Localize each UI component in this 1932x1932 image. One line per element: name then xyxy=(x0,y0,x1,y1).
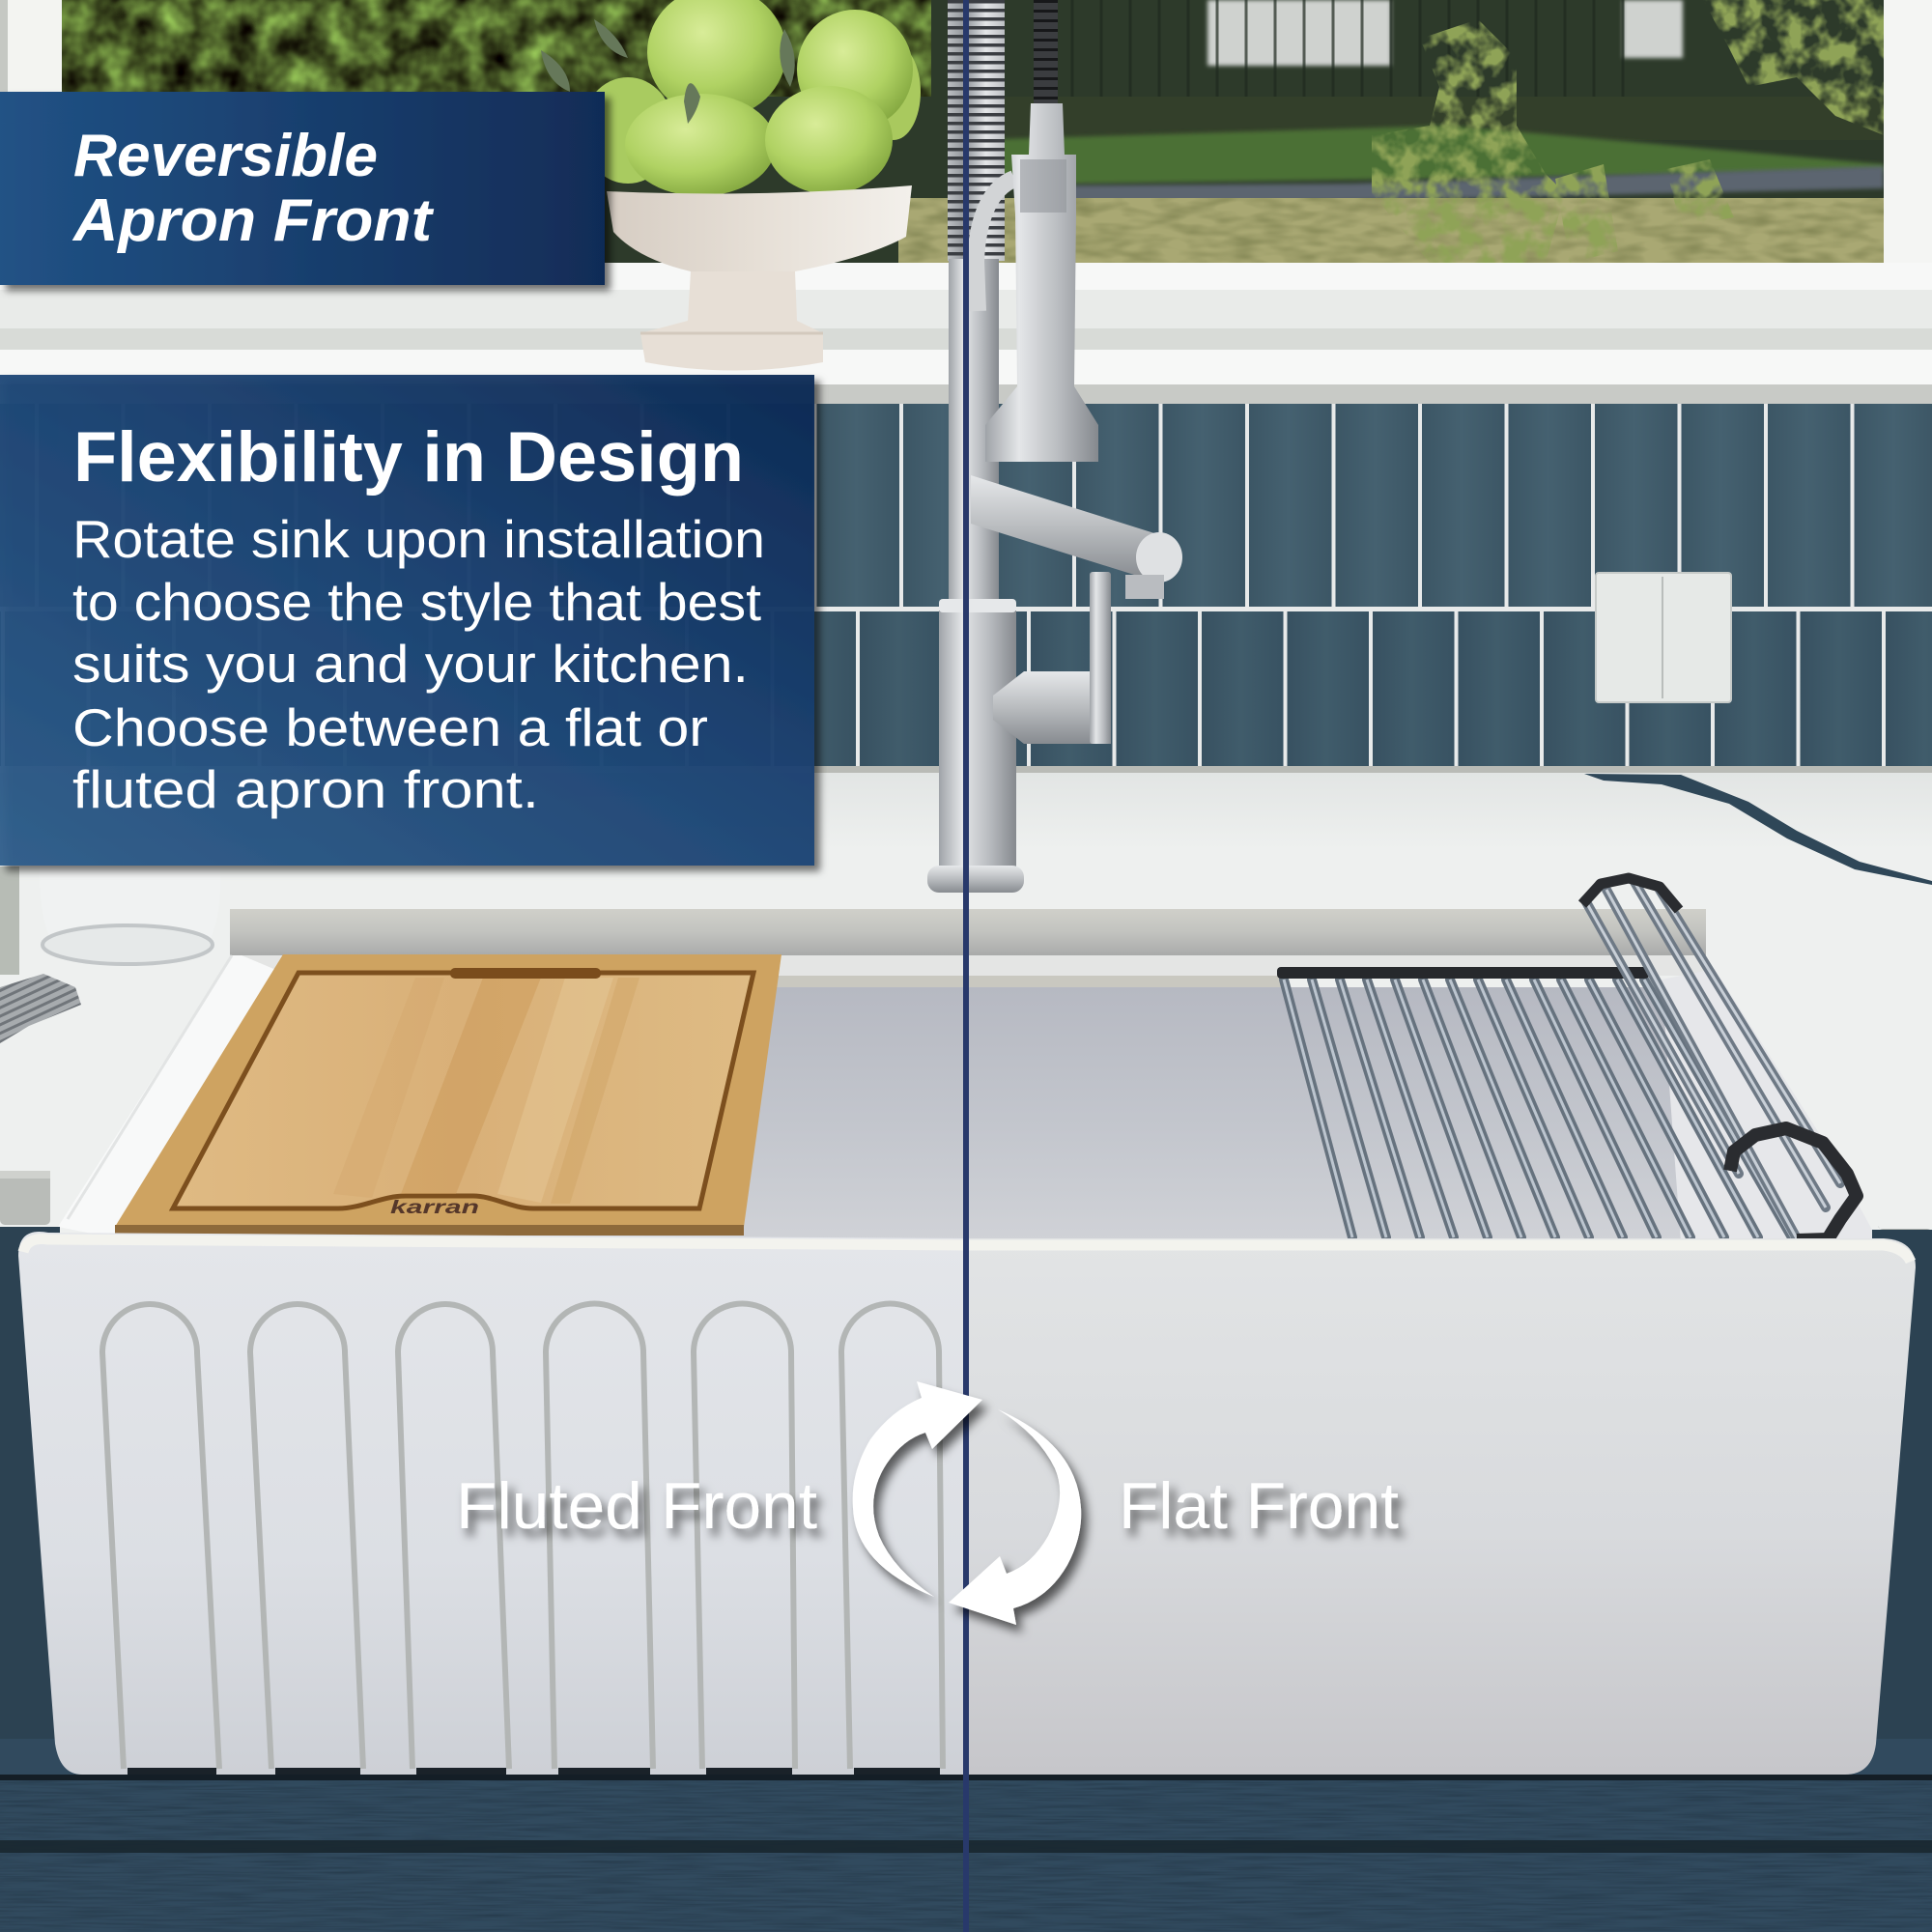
arrow: upper left xyxy=(853,1381,982,1597)
panel title xyxy=(71,123,434,254)
heading: Flexibility in Design xyxy=(73,418,744,497)
panel title: Reversible xyxy=(73,123,378,189)
sink basin xyxy=(290,955,1932,1242)
background: view through window xyxy=(62,0,1893,263)
body text: Rotate sink upon installation xyxy=(72,509,765,569)
faucet xyxy=(927,0,1182,893)
panel: reversible apron front xyxy=(0,92,605,285)
label: flat front: Flat Front xyxy=(1119,1469,1399,1543)
countertop xyxy=(0,766,1932,1249)
wall switch xyxy=(1596,573,1731,702)
apple bowl xyxy=(541,0,921,371)
riser xyxy=(949,259,999,607)
farmhouse apron: flat half xyxy=(966,1238,1916,1775)
flutes xyxy=(102,1304,943,1769)
panel title: Apron Front xyxy=(71,187,434,254)
wood planks xyxy=(333,978,639,1204)
cutting board xyxy=(115,954,781,1236)
column xyxy=(939,611,1016,869)
body text xyxy=(72,509,765,819)
brand mark on board: karran xyxy=(390,1198,479,1218)
board inner panel xyxy=(173,973,753,1208)
body text: fluted apron front. xyxy=(72,759,539,819)
panel: flexibility in design xyxy=(0,375,814,866)
spout xyxy=(971,475,1154,580)
body text: suits you and your kitchen. xyxy=(72,634,749,694)
center divider line xyxy=(963,0,969,1932)
cabinet xyxy=(0,1227,1932,1932)
folded towel xyxy=(0,974,81,1043)
icon: rotation arrows xyxy=(853,1381,1081,1625)
base xyxy=(927,866,1024,893)
marble vein xyxy=(1584,774,1932,885)
apples xyxy=(541,0,921,196)
fence bars xyxy=(1072,0,1623,97)
body text: Choose between a flat or xyxy=(72,697,708,757)
handle slot xyxy=(450,968,601,979)
window frame and sill xyxy=(0,0,1932,404)
roll-up drying rack xyxy=(1277,878,1857,1240)
body text: to choose the style that best xyxy=(72,572,761,632)
handle xyxy=(993,671,1111,744)
farmhouse apron: fluted half xyxy=(18,1232,966,1775)
label: fluted front: Fluted Front xyxy=(456,1469,817,1543)
backsplash tiles xyxy=(0,404,1932,766)
arrow: lower right xyxy=(949,1409,1081,1625)
drinking glass xyxy=(0,867,220,975)
spring coil xyxy=(948,0,1005,261)
shrubs and tree xyxy=(1352,0,1893,263)
spray head xyxy=(985,103,1098,462)
hose xyxy=(1034,0,1058,104)
distant building xyxy=(1208,0,1683,66)
arm xyxy=(976,179,1014,311)
sink rim xyxy=(58,909,1706,1238)
